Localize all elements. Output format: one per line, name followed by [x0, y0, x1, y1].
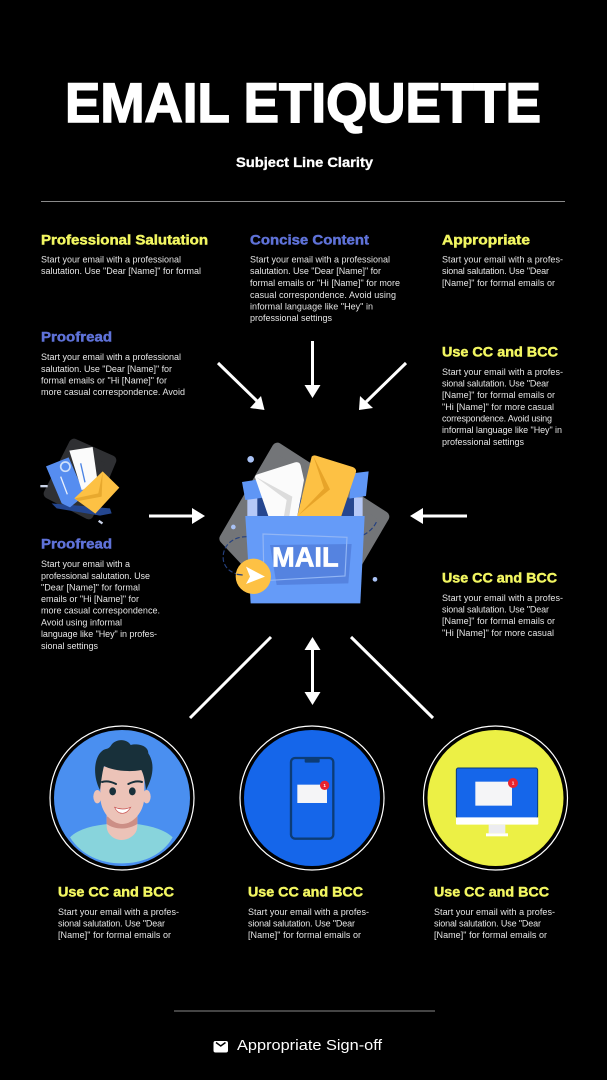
icon: footer envelope: [214, 1041, 228, 1052]
text block: use cc and bcc under person: sional salutation. Use "Dear: [58, 918, 165, 928]
text block: use cc and bcc right upper: informal language like "Hey" in: [442, 425, 562, 435]
icon: mailbox illustration: MAIL: [272, 542, 339, 573]
text block: use cc and bcc right lower: Use CC and BCC: [442, 570, 557, 586]
text block: use cc and bcc right upper: "Hi [Name]" for more casual: [442, 402, 554, 412]
icon: phone circle: [240, 726, 384, 870]
icon: phone circle: 1: [323, 783, 326, 788]
text block: use cc and bcc right lower: [442, 570, 563, 638]
text block: use cc and bcc under person: [Name]" for formal emails or: [58, 930, 171, 940]
arrow: top right to mailbox: [359, 363, 406, 410]
text block: proofread lower: "Dear [Name]" for formal: [41, 582, 140, 592]
arrow: top center to mailbox: [304, 341, 320, 398]
icon: person circle: [50, 726, 194, 870]
text block: concise content: Start your email with a professional: [250, 254, 390, 264]
text block: use cc and bcc under person: Start your email with a profes-: [58, 907, 179, 917]
text block: concise content: [250, 232, 400, 323]
text block: proofread top: [41, 330, 185, 397]
text block: professional salutation: Professional Salutation: [41, 232, 208, 248]
text block: proofread top: Proofread: [41, 330, 112, 344]
text block: appropriate: Appropriate: [442, 232, 531, 248]
text block: concise content: professional settings: [250, 313, 332, 323]
text block: use cc and bcc under person: Use CC and BCC: [58, 884, 174, 900]
text block: use cc and bcc under phone: sional salutation. Use "Dear: [248, 918, 355, 928]
text block: use cc and bcc right upper: sional salutation. Use "Dear: [442, 378, 549, 388]
text block: use cc and bcc right upper: professional settings: [442, 437, 524, 447]
text block: use cc and bcc right lower: "Hi [Name]" for more casual: [442, 628, 554, 638]
text block: professional salutation: Start your email with a professional: [41, 254, 181, 264]
text block: use cc and bcc right upper: [442, 344, 563, 447]
icon: desktop circle: 1: [512, 781, 515, 786]
text block: concise content: informal language like "Hey" in: [250, 302, 373, 312]
text block: concise content: casual correspondence. Avoid using: [250, 290, 396, 300]
icon: desktop circle: [424, 726, 568, 870]
text block: use cc and bcc under desktop: [434, 884, 555, 940]
text block: use cc and bcc under desktop: Use CC and BCC: [434, 884, 549, 900]
text block: proofread lower: sional settings: [41, 641, 98, 651]
text block: proofread lower: language like "Hey" in profes-: [41, 629, 157, 639]
connector: mailbox to desktop: [351, 637, 433, 718]
text block: use cc and bcc right lower: [Name]" for formal emails or: [442, 616, 555, 626]
subtitle: Subject Line Clarity: [236, 155, 374, 170]
text block: use cc and bcc under phone: Use CC and BCC: [248, 884, 363, 900]
footer text: Appropriate Sign-off: [237, 1037, 383, 1054]
text block: appropriate: [442, 232, 563, 288]
text block: use cc and bcc under desktop: Start your email with a profes-: [434, 907, 555, 917]
arrow: double headed to phone: [304, 637, 320, 705]
title: EMAIL ETIQUETTE: [65, 71, 541, 134]
text block: proofread top: more casual correspondence. Avoid: [41, 387, 185, 397]
arrow: left to mailbox: [149, 508, 205, 524]
text block: use cc and bcc under phone: Start your email with a profes-: [248, 907, 369, 917]
arrow: right to mailbox: [410, 508, 467, 524]
text block: use cc and bcc right upper: Use CC and BCC: [442, 344, 558, 360]
text block: use cc and bcc right upper: [Name]" for formal emails or: [442, 390, 555, 400]
white envelope: [255, 462, 304, 516]
text block: appropriate: [Name]" for formal emails or: [442, 278, 555, 288]
arrow: top left to mailbox: [218, 363, 264, 410]
text block: proofread lower: Start your email with a: [41, 559, 130, 569]
text block: proofread lower: more casual correspondence.: [41, 606, 160, 616]
text block: appropriate: sional salutation. Use "Dear: [442, 266, 549, 276]
text block: professional salutation: [41, 232, 208, 276]
text block: proofread top: formal emails or "Hi [Name]" for: [41, 376, 167, 386]
text block: use cc and bcc right upper: Start your email with a profes-: [442, 367, 563, 377]
text block: professional salutation: salutation. Use "Dear [Name]" for formal: [41, 266, 201, 276]
text block: proofread lower: Proofread: [41, 536, 112, 552]
text block: concise content: salutation. Use "Dear [Name]" for: [250, 266, 381, 276]
text block: proofread top: salutation. Use "Dear [Name]" for: [41, 364, 172, 374]
text block: proofread lower: professional salutation. Use: [41, 571, 150, 581]
connector: mailbox to person: [190, 637, 271, 718]
icon: mailbox illustration: [223, 448, 384, 603]
text block: use cc and bcc under phone: [248, 884, 369, 940]
text block: proofread lower: [41, 536, 160, 651]
text block: appropriate: Start your email with a profes-: [442, 254, 563, 264]
text block: proofread lower: Avoid using informal: [41, 618, 122, 628]
text block: proofread lower: emails or "Hi [Name]" for: [41, 594, 139, 604]
text block: use cc and bcc right lower: Start your email with a profes-: [442, 593, 563, 603]
text block: use cc and bcc right lower: sional salutation. Use "Dear: [442, 604, 549, 614]
text block: use cc and bcc under desktop: [Name]" for formal emails or: [434, 930, 547, 940]
text block: concise content: formal emails or "Hi [Name]" for more: [250, 278, 400, 288]
text block: concise content: Concise Content: [250, 232, 370, 248]
text block: use cc and bcc under phone: [Name]" for formal emails or: [248, 930, 361, 940]
text block: proofread top: Start your email with a professional: [41, 352, 181, 362]
yellow envelope: [297, 455, 356, 516]
text block: use cc and bcc under desktop: sional salutation. Use "Dear: [434, 918, 541, 928]
text block: use cc and bcc under person: [58, 884, 179, 940]
text block: use cc and bcc right upper: correspondence. Avoid using: [442, 414, 552, 424]
icon: envelopes illustration: [40, 444, 119, 524]
